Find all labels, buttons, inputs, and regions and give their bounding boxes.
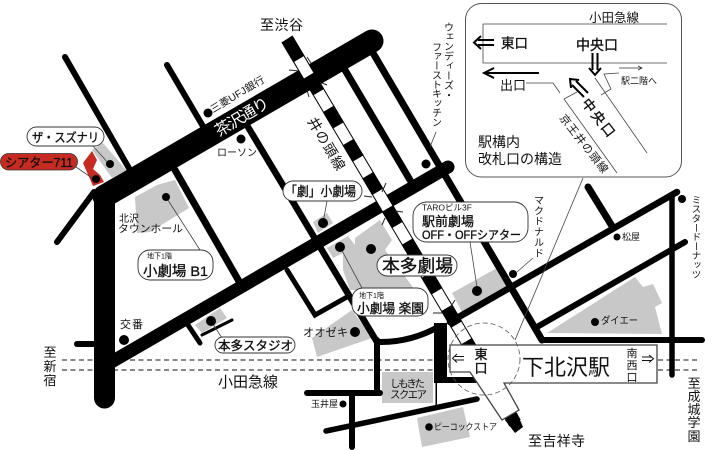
inset: Odakyu platform lines <box>483 24 667 63</box>
label: シアター711: シアター711 <box>5 156 73 170</box>
label: ザ・スズナリ <box>27 127 104 146</box>
place names: 至 <box>43 345 57 360</box>
label: 「劇」小劇場: 「劇」小劇場 <box>285 184 356 199</box>
inset: exit arrow: 出口 <box>500 78 526 93</box>
inset: caption: 改札口の構造 <box>478 151 562 167</box>
label: 本多劇場: 本多劇場 <box>382 256 453 276</box>
label: 駅前劇場 OFF・OFFシアター: OFF・OFFシアター <box>422 228 521 242</box>
label: 小劇場 B1: 地下1階 <box>147 250 172 260</box>
inset: exit arrow <box>484 68 560 93</box>
inset: central exit <box>576 37 618 75</box>
place names: マクドナルド <box>532 195 544 258</box>
label: 小劇場 楽園: 小劇場 楽園 <box>357 301 424 316</box>
label: 駅前劇場 OFF・OFFシアター: 駅前劇場 <box>422 214 474 229</box>
label: 小劇場 B1: 小劇場 B1 <box>143 263 208 279</box>
inset: caption <box>478 134 562 167</box>
inset: to second floor arrow <box>619 66 657 86</box>
place names: 松屋 <box>622 231 640 242</box>
inset: Keio Inokashira line outline <box>564 73 647 173</box>
inset: central exit: 中央口 <box>576 37 618 53</box>
inset panel: station gate structure <box>466 4 682 177</box>
leader lines <box>76 132 533 338</box>
place names: 至吉祥寺 <box>528 433 585 449</box>
place names: ダイエー <box>601 314 638 327</box>
place names: 北沢 <box>119 212 139 225</box>
place names: スクエア <box>390 389 427 401</box>
label: 小劇場 楽園 <box>352 288 428 316</box>
place names: ピーコックストア <box>434 422 497 432</box>
inset: caption: 駅構内 <box>478 134 520 150</box>
place names: 成 <box>687 389 701 404</box>
place names: 玉井屋 <box>311 398 338 409</box>
label: 駅前劇場 OFF・OFFシアター: TAROビル3F <box>422 202 472 212</box>
inset: east exit <box>474 36 528 51</box>
inset: Keio Inokashira label: 京王井の頭線 <box>557 111 612 177</box>
place names: 城 <box>687 402 701 417</box>
station box: 下北沢駅: 西 <box>626 360 638 372</box>
place names: ウェンディーズ・ <box>442 22 454 100</box>
inset: diagonal arrow <box>570 79 588 97</box>
label: 小劇場 B1 <box>138 250 213 280</box>
station box: 下北沢駅: 口 <box>474 361 488 376</box>
place names: オオゼキ <box>303 326 348 339</box>
station box: 下北沢駅 <box>448 323 657 433</box>
thin leader from inset to station <box>515 178 583 340</box>
place names: タウンホール <box>118 223 183 235</box>
inset: east exit: 東口 <box>501 36 528 51</box>
label: 駅前劇場 OFF・OFFシアター <box>413 202 528 242</box>
place names: 井の頭線 <box>304 114 349 174</box>
inset: to second floor arrow: 駅二階へ <box>621 76 657 86</box>
station box: 下北沢駅: 口 <box>626 372 638 384</box>
place names: 宿 <box>43 373 57 388</box>
location dots <box>92 108 686 431</box>
place names: 交番 <box>120 318 143 331</box>
label: 本多スタジオ: 本多スタジオ <box>218 339 293 353</box>
place names: ローソン <box>217 148 257 159</box>
place names: ミスタードーナッツ <box>690 195 701 279</box>
Inokashira railway line <box>287 39 515 423</box>
station box: 下北沢駅: 南 <box>626 347 638 360</box>
place names: 学 <box>687 415 701 430</box>
gray building blocks <box>92 143 662 447</box>
label: ザ・スズナリ: ザ・スズナリ <box>32 130 99 145</box>
place names: 新 <box>43 359 57 374</box>
place names: 園 <box>687 429 701 444</box>
station box: 下北沢駅: 下北沢駅 <box>522 355 610 380</box>
place names: しもきた <box>390 378 425 390</box>
inset: Odakyu label: 小田急線 <box>589 10 639 25</box>
inset: rotated central exit: 中央口 <box>579 96 619 141</box>
place names: 三菱UFJ銀行 <box>208 73 267 116</box>
red building: シアター711 <box>83 151 104 186</box>
place names: 至渋谷 <box>260 17 303 33</box>
station box: 下北沢駅: 東 <box>474 347 488 362</box>
place names: ファーストキッチン <box>430 42 440 127</box>
Odakyu line dashed tracks <box>62 360 700 370</box>
label: 小劇場 楽園: 地下1階 <box>359 290 384 300</box>
place names: 至 <box>687 376 701 391</box>
place names: 茶沢通り <box>212 94 272 140</box>
place names: 小田急線 <box>218 374 278 391</box>
